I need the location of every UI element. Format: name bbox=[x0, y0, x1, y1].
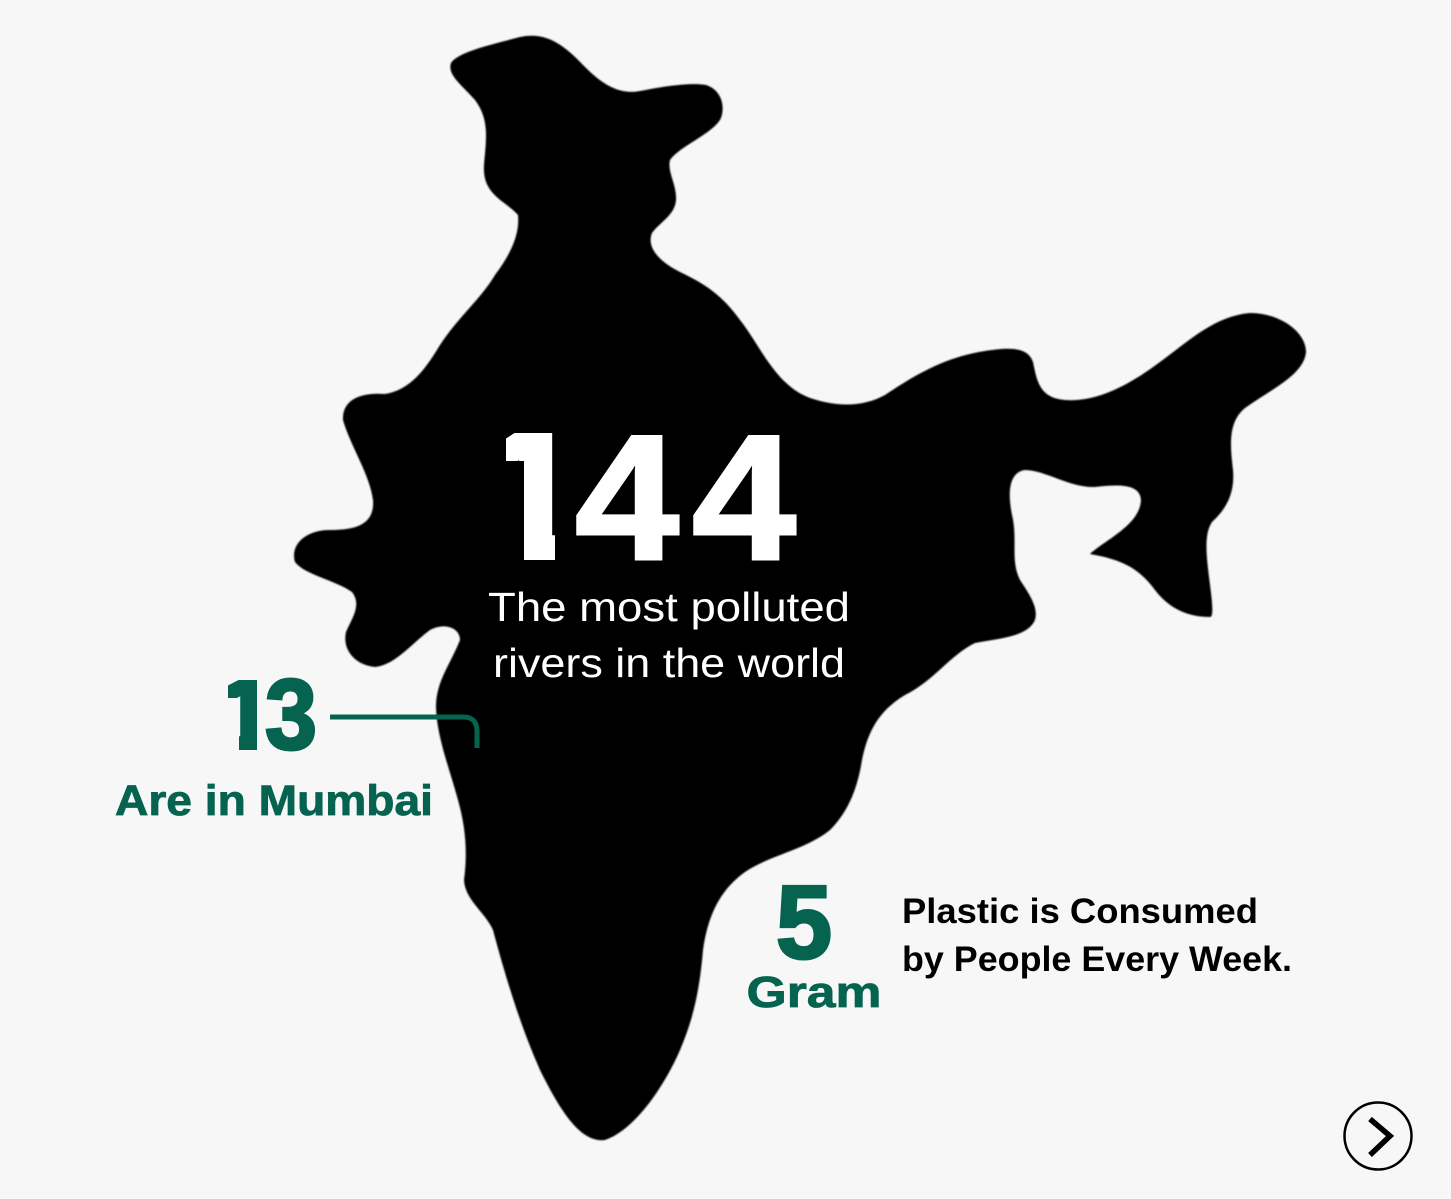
plastic description: Plastic is Consumed bbox=[902, 892, 1258, 931]
headline statistic: 144: 4 bbox=[692, 398, 796, 597]
headline caption bbox=[488, 584, 850, 686]
plastic description bbox=[902, 892, 1292, 979]
headline caption: The most polluted bbox=[488, 584, 850, 630]
icon: next arrow button bbox=[1344, 1102, 1412, 1170]
map of India bbox=[294, 36, 1306, 1140]
statistic: 13: 3 bbox=[265, 659, 317, 771]
statistic: 5: 5 bbox=[776, 865, 832, 981]
headline statistic: 144: 4 bbox=[575, 398, 679, 597]
headline statistic: 144 bbox=[506, 433, 797, 560]
headline statistic: 144: 1 bbox=[480, 391, 582, 597]
label: Are in Mumbai: Are in Mumbai bbox=[115, 777, 433, 825]
plastic description: by People Every Week. bbox=[902, 940, 1292, 979]
statistic: 13 bbox=[228, 678, 315, 752]
statistic: 13: 1 bbox=[214, 659, 284, 771]
headline caption: rivers in the world bbox=[493, 640, 845, 686]
label: Gram: Gram bbox=[746, 968, 882, 1017]
connector line from 13 to map bbox=[330, 717, 477, 748]
